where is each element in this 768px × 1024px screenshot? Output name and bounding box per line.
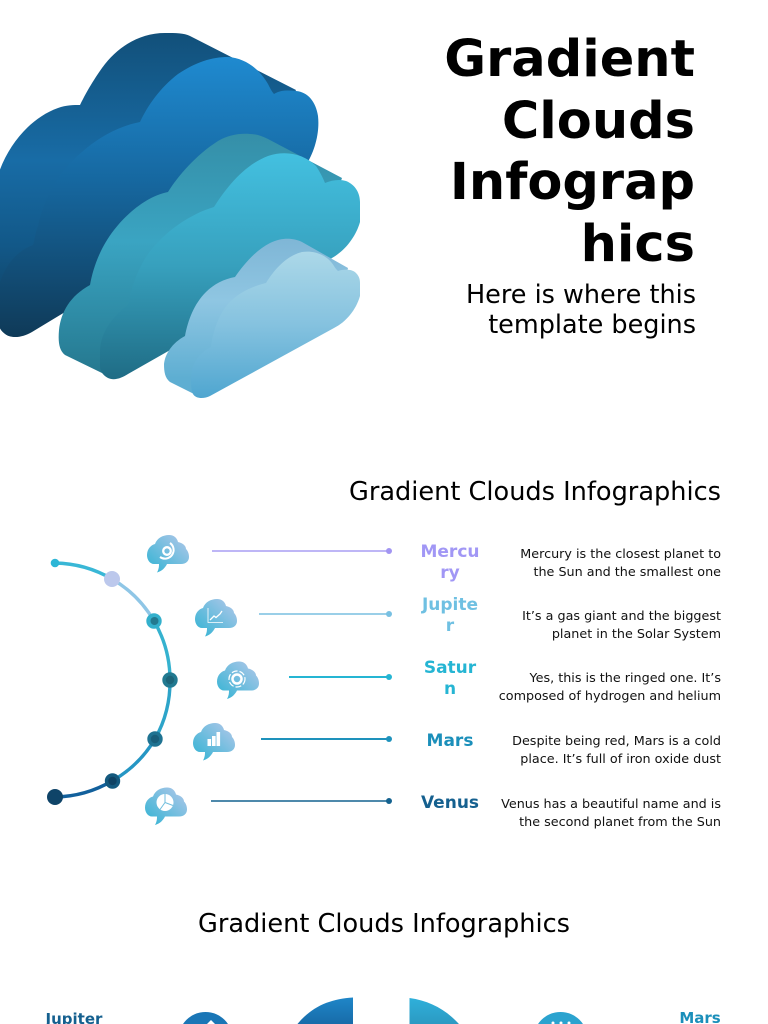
bottom chart: left sector bbox=[293, 998, 353, 1024]
heading: section one: Gradient Clouds Infographics bbox=[349, 477, 721, 507]
text: Mars: place. It’s full of iron oxide dust bbox=[520, 752, 721, 767]
illustration: stacked isometric clouds bbox=[0, 33, 360, 398]
connector: Mars bbox=[261, 736, 392, 742]
label: Venus: Venus bbox=[421, 793, 479, 813]
icon: cloud with ring bbox=[217, 662, 259, 699]
connector: Saturn bbox=[289, 674, 392, 680]
label: Jupiter: Jupite bbox=[422, 595, 478, 615]
heading: section two: Gradient Clouds Infographics bbox=[198, 909, 570, 939]
text: Mars: Despite being red, Mars is a cold bbox=[512, 734, 721, 749]
connector: Mercury bbox=[212, 548, 392, 554]
label: Saturn: n bbox=[444, 678, 456, 698]
icon: cloud with bar chart bbox=[193, 723, 235, 760]
icon: cloud with donut bbox=[147, 535, 189, 572]
label: Saturn bbox=[424, 658, 476, 698]
subtitle: template begins bbox=[488, 310, 696, 340]
text: Venus: Venus has a beautiful name and is bbox=[501, 797, 721, 812]
text: Mercury: Mercury is the closest planet to bbox=[520, 547, 721, 562]
connector: Venus bbox=[211, 798, 392, 804]
title bbox=[444, 30, 695, 274]
label: Mars: Mars bbox=[427, 731, 473, 751]
text: Jupiter bbox=[522, 609, 721, 642]
label: Mercury: ry bbox=[440, 562, 460, 582]
connector: Jupiter bbox=[259, 611, 392, 617]
label: Saturn: Satur bbox=[424, 658, 476, 678]
icon: cloud with pie chart bbox=[145, 788, 187, 825]
text: Jupiter: planet in the Solar System bbox=[552, 627, 721, 642]
cloud: medium teal bbox=[59, 134, 360, 379]
text: Jupiter: It’s a gas giant and the biggest bbox=[522, 609, 721, 624]
label: Mercury bbox=[420, 542, 480, 582]
icon: cloud with line chart bbox=[195, 599, 237, 636]
title: hics bbox=[581, 214, 695, 274]
title: Gradient bbox=[444, 30, 695, 89]
timeline arc with nodes bbox=[47, 559, 178, 805]
title: Clouds bbox=[502, 92, 695, 150]
text: Saturn: composed of hydrogen and helium bbox=[499, 689, 721, 704]
text: Mars bbox=[512, 734, 721, 767]
subtitle bbox=[466, 280, 696, 340]
cloud: small light blue bbox=[164, 239, 360, 398]
bottom icon: left circle bbox=[178, 1012, 232, 1024]
text: Mercury bbox=[520, 547, 721, 580]
text: Mercury: the Sun and the smallest one bbox=[533, 565, 721, 580]
cloud: large blue bbox=[0, 33, 318, 337]
bottom chart: right sector bbox=[410, 998, 464, 1024]
text: Venus: the second planet from the Sun bbox=[519, 815, 721, 830]
text: Saturn: Yes, this is the ringed one. It’s bbox=[530, 671, 721, 686]
text: Saturn bbox=[499, 671, 721, 704]
bottom icon: right circle bbox=[534, 1012, 588, 1024]
label: Jupiter bbox=[421, 595, 478, 636]
label: Jupiter: r bbox=[446, 616, 454, 636]
subtitle: Here is where this bbox=[466, 280, 696, 310]
title: Infograp bbox=[450, 153, 695, 212]
label: Mercury: Mercu bbox=[420, 542, 480, 562]
text: Venus bbox=[501, 797, 721, 830]
